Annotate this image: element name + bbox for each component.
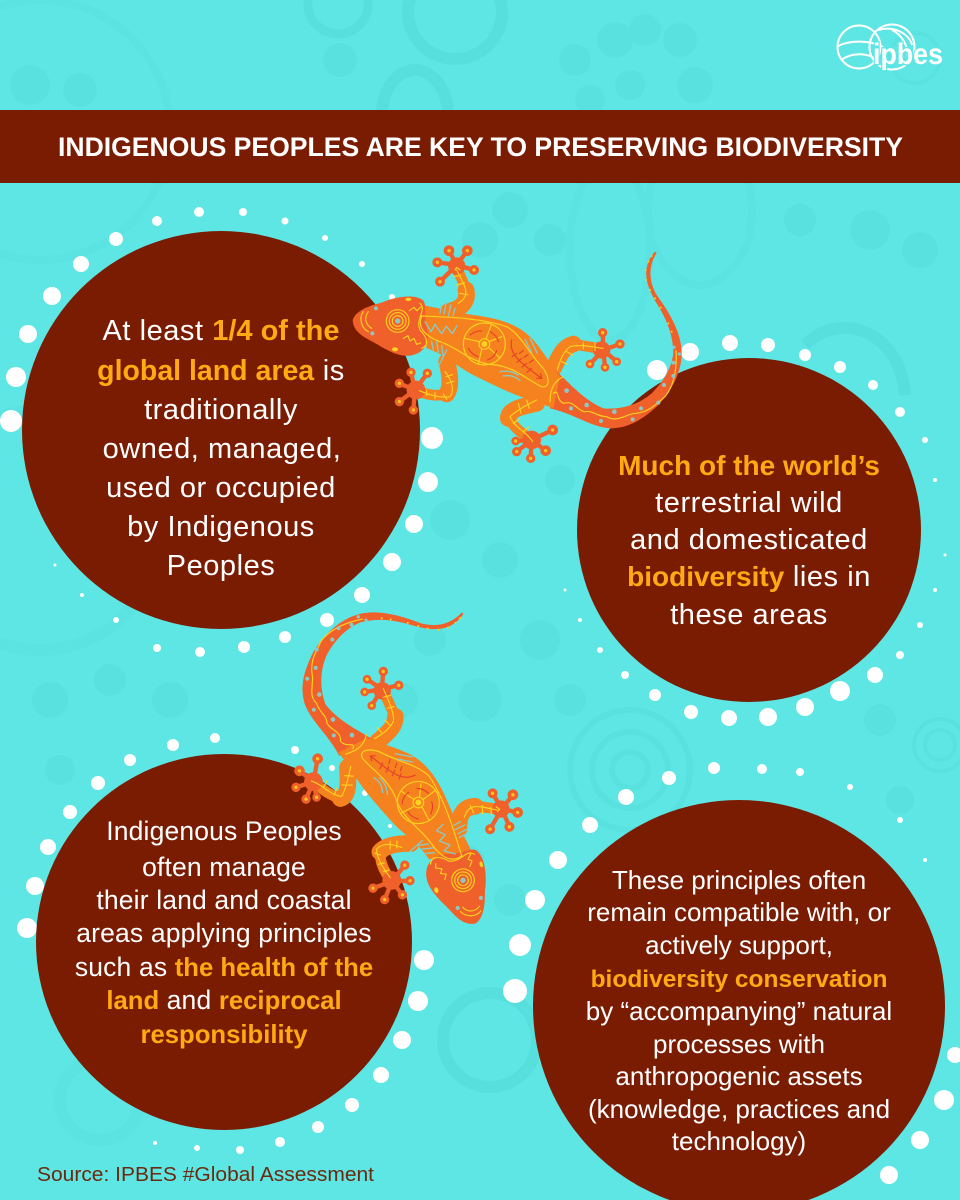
text: land area: global land area is xyxy=(97,355,345,387)
text: principles: These principles often xyxy=(612,865,866,895)
logo: ipbes xyxy=(838,24,943,71)
text: principles: (knowledge, practices and xyxy=(588,1094,890,1124)
title: INDIGENOUS PEOPLES ARE KEY TO PRESERVING BIODIVERSITY xyxy=(58,132,903,162)
text: principles: actively support, xyxy=(645,930,833,960)
text: biodiversity: Much of the world’s xyxy=(618,450,880,481)
text: land area: by Indigenous xyxy=(127,511,315,543)
text: land management: Indigenous Peoples xyxy=(106,816,342,846)
icon: upper gecko xyxy=(353,245,682,463)
panel: land area circle xyxy=(22,231,420,629)
panel: land management circle xyxy=(36,754,412,1130)
text: biodiversity: and domesticated xyxy=(630,524,868,556)
text: land area: Peoples xyxy=(167,550,275,582)
text: land management: areas applying principles xyxy=(76,918,372,948)
text: land area: owned, managed, xyxy=(103,433,341,465)
panel: biodiversity circle xyxy=(577,358,921,702)
text: principles: biodiversity conservation xyxy=(591,966,887,993)
text: principles: by “accompanying” natural xyxy=(586,996,892,1026)
logo: ipbes: ipbes xyxy=(873,38,943,71)
text: principles: technology) xyxy=(672,1126,806,1156)
text: land management: such as the health of the xyxy=(75,952,373,982)
text: land area: used or occupied xyxy=(106,472,336,504)
icon: lower gecko xyxy=(252,586,548,960)
text: land management: their land and coastal xyxy=(96,885,352,915)
text: principles: anthropogenic assets xyxy=(615,1061,863,1091)
text: biodiversity: these areas xyxy=(670,599,828,631)
text: land area: At least 1/4 of the xyxy=(102,315,340,347)
text: principles: remain compatible with, or xyxy=(587,897,891,927)
text: biodiversity: biodiversity lies in xyxy=(627,561,871,593)
text: principles: processes with xyxy=(653,1029,825,1059)
panel: principles circle xyxy=(533,800,945,1200)
text: land area: traditionally xyxy=(144,394,298,426)
text: land management: often manage xyxy=(142,852,306,882)
text: land management: land and reciprocal xyxy=(106,985,342,1015)
text: land management: responsibility xyxy=(140,1021,308,1049)
source note: Source: IPBES #Global Assessment xyxy=(37,1164,374,1186)
title banner xyxy=(0,110,960,183)
text: biodiversity: terrestrial wild xyxy=(655,487,843,519)
